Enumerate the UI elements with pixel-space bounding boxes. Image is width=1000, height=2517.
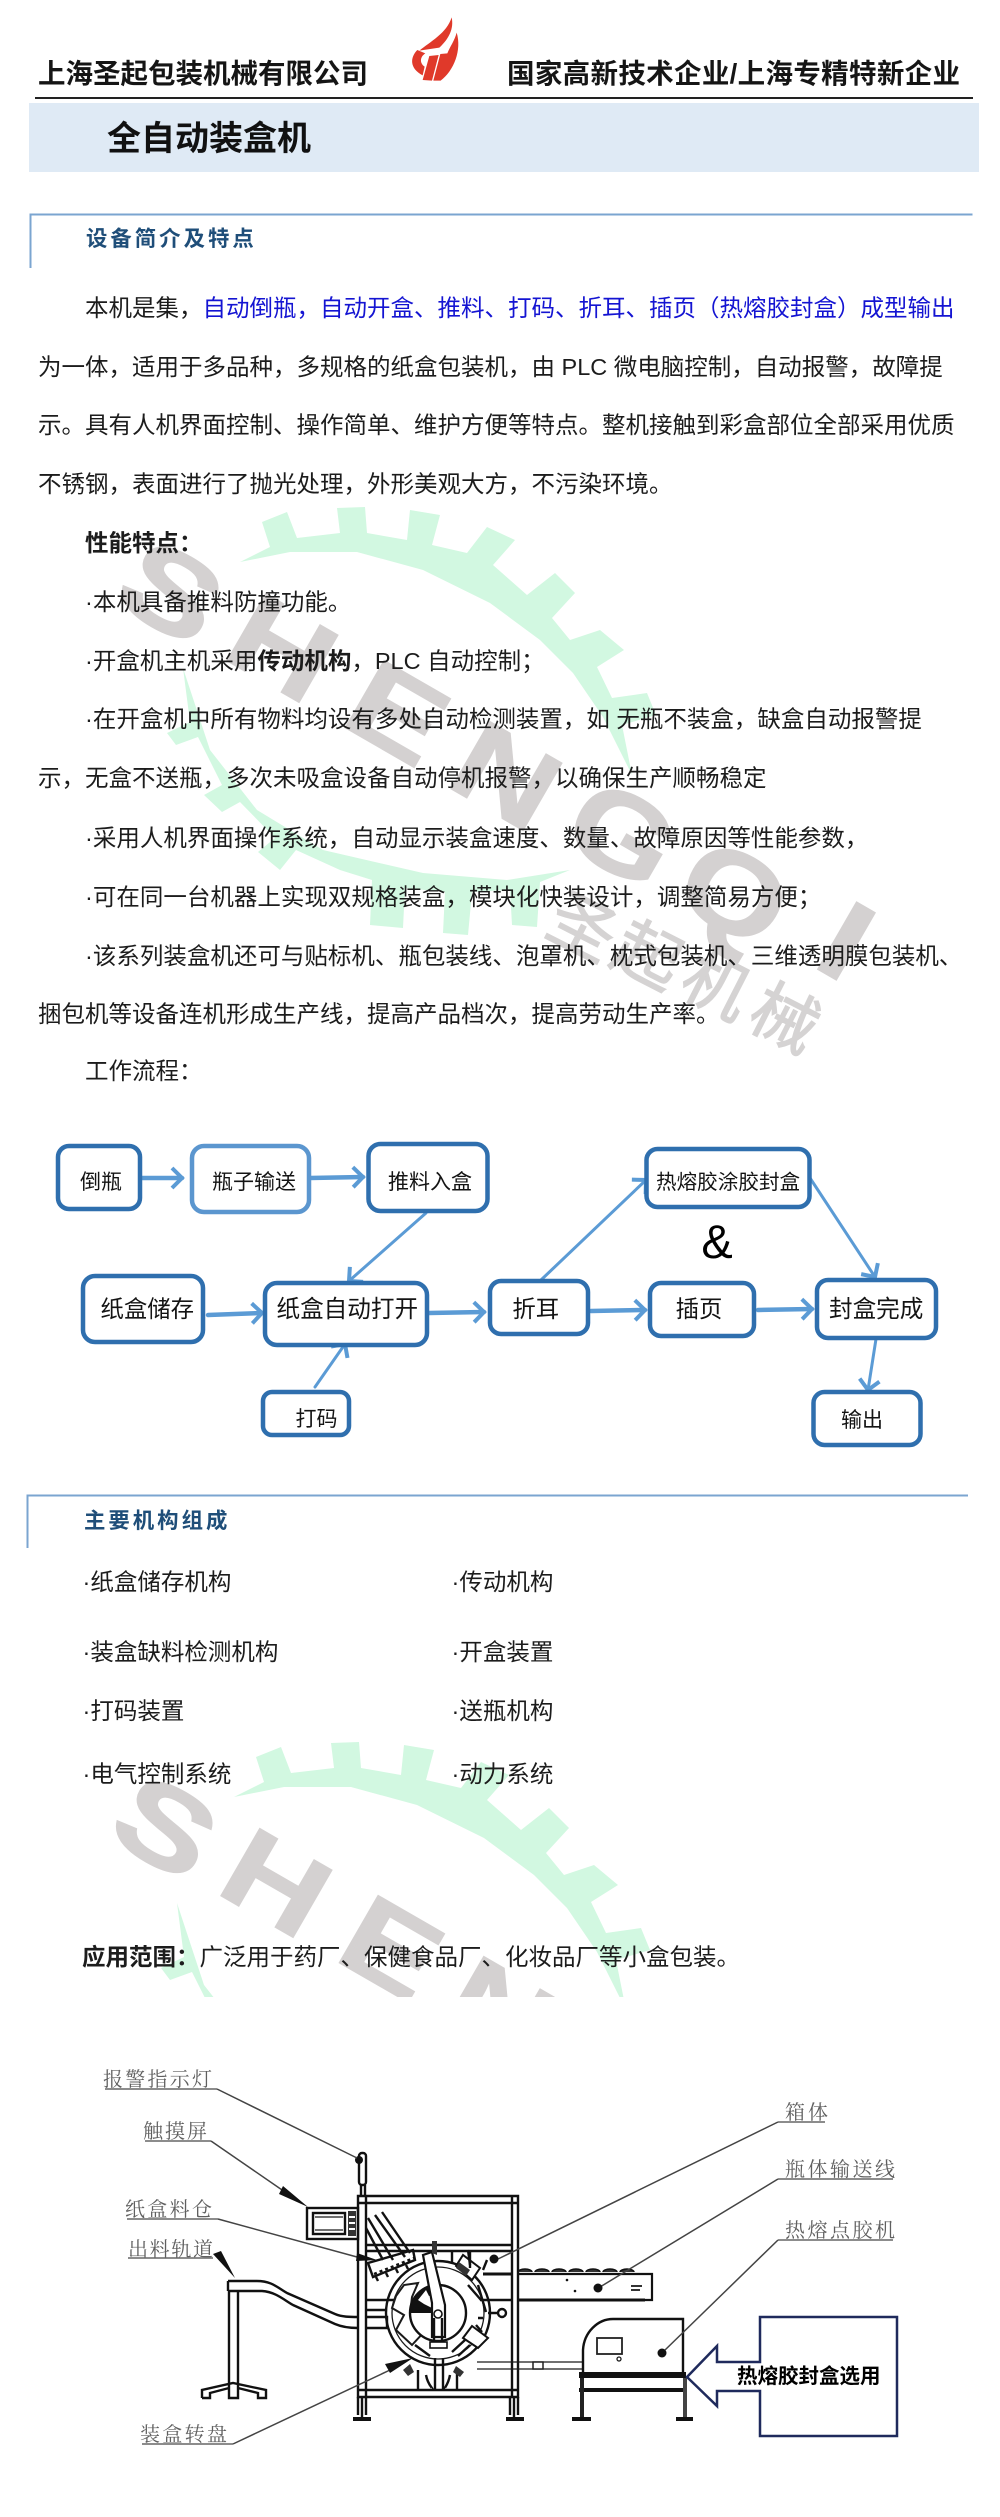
label: 装盒转盘: 装盒转盘 <box>140 2423 227 2446</box>
header rule <box>35 97 973 99</box>
intro paragraph <box>38 295 954 497</box>
label: 瓶体输送线: 瓶体输送线 <box>785 2158 895 2181</box>
label: 箱体: 箱体 <box>785 2101 828 2124</box>
application scope: 应用范围：广泛用于药厂、保健食品厂、化妆品厂等小盒包装。 <box>82 1944 740 1970</box>
node: 纸盒自动打开: 纸盒自动打开 <box>276 1296 418 1323</box>
mechanism list: ·传动机构 <box>452 1569 553 1595</box>
performance features: ·该系列装盒机还可与贴标机、瓶包装线、泡罩机、枕式包装机、三维透明膜包装机、 <box>85 943 962 969</box>
label: 热熔点胶机: 热熔点胶机 <box>785 2219 895 2242</box>
node: 插页 <box>650 1283 754 1336</box>
conveyor <box>477 2269 652 2369</box>
performance features <box>38 530 962 1027</box>
watermark gear lower arc <box>167 668 570 935</box>
arrow: 打码 to 纸盒自动打开 <box>315 1344 345 1387</box>
performance features: ·开盒机主机采用传动机构，PLC 自动控制； <box>85 648 545 674</box>
hot melt glue machine <box>572 2319 693 2421</box>
intro paragraph: 不锈钢，表面进行了抛光处理，外形美观大方，不污染环境。 <box>38 471 672 497</box>
section heading: 设备简介及特点: 设备简介及特点 <box>86 227 257 251</box>
watermark: lower gear and SHENGQI, cropped <box>116 1742 650 1997</box>
lower watermark letters: E <box>319 1870 464 2027</box>
mechanism list: ·送瓶机构 <box>452 1698 553 1724</box>
arrow: 瓶子输送 to 推料入盒 <box>310 1177 363 1178</box>
watermark letters <box>97 512 896 1006</box>
arrow: 热熔胶涂胶封盒 to 封盒完成 <box>810 1178 875 1277</box>
section heading: 主要机构组成 <box>28 1496 968 1548</box>
callout: 热熔胶封盒选用: 热熔胶封盒选用 <box>737 2364 880 2388</box>
label: 触摸屏 <box>143 2120 308 2207</box>
watermark letters: N <box>430 696 582 857</box>
label: 纸盒料仓 <box>125 2198 377 2261</box>
performance features: ·本机具备推料防撞功能。 <box>85 589 351 615</box>
performance features: ·采用人机界面操作系统，自动显示装盒速度、数量、故障原因等性能参数， <box>85 825 868 851</box>
node: 封盒完成: 封盒完成 <box>829 1296 923 1323</box>
title band <box>29 103 979 172</box>
title: 全自动装盒机 <box>107 120 311 158</box>
watermark letters: E <box>325 635 470 792</box>
mechanism list: ·开盒装置 <box>452 1639 553 1665</box>
arrow: 折耳 to 热熔胶涂胶封盒 <box>541 1180 646 1280</box>
label: 瓶体输送线 <box>594 2158 895 2292</box>
lower watermark letters <box>116 1782 555 1997</box>
watermark letters: I <box>797 876 896 1006</box>
watermark letters: S <box>97 512 246 671</box>
node: 瓶子输送 <box>192 1146 309 1212</box>
node: 插页: 插页 <box>676 1296 722 1322</box>
intro paragraph: 示。具有人机界面控制、操作简单、维护方便等特点。整机接触到彩盒部位全部采用优质 <box>38 412 954 438</box>
watermark letters: H <box>206 568 358 729</box>
company name: 上海圣起包装机械有限公司 <box>38 58 368 89</box>
label: 报警指示灯 <box>103 2068 357 2158</box>
label: 出料轨道 <box>128 2238 235 2278</box>
mechanism list: ·装盒缺料检测机构 <box>82 1639 278 1665</box>
arrow: 插页 to 封盒完成 <box>758 1309 812 1310</box>
label: 出料轨道: 出料轨道 <box>128 2238 213 2261</box>
performance features: 性能特点： <box>85 530 202 556</box>
performance features: 捆包机等设备连机形成生产线，提高产品档次，提高劳动生产率。 <box>38 1001 720 1027</box>
node: 输出 <box>814 1392 920 1445</box>
label: 报警指示灯: 报警指示灯 <box>103 2068 212 2091</box>
alarm lamp <box>355 2153 366 2196</box>
intro paragraph: 本机是集，自动倒瓶，自动开盒、推料、打码、折耳、插页（热熔胶封盒）成型输出 <box>85 295 954 321</box>
node: 纸盒储存: 纸盒储存 <box>100 1296 194 1322</box>
lower watermark letters: S <box>91 1747 240 1906</box>
node: 打码: 打码 <box>296 1408 338 1431</box>
watermark chinese name: 机 <box>670 938 763 1034</box>
section heading: 主要机构组成: 主要机构组成 <box>84 1509 230 1533</box>
node: 打码 <box>263 1392 349 1435</box>
mechanism list <box>82 1569 553 1787</box>
arrow: 纸盒自动打开 to 折耳 <box>429 1312 484 1313</box>
label: 触摸屏: 触摸屏 <box>143 2120 207 2143</box>
lower watermark letters: H <box>200 1803 352 1964</box>
label: 箱体 <box>490 2101 828 2264</box>
watermark gear upper arc <box>240 507 656 775</box>
carton magazine <box>366 2212 415 2281</box>
performance features: ·在开盒机中所有物料均设有多处自动检测装置，如 无瓶不装盒，缺盒自动报警提 <box>85 706 922 732</box>
page header <box>35 17 973 99</box>
node: 推料入盒 <box>368 1144 488 1211</box>
ampersand: & <box>701 1215 733 1268</box>
touch screen <box>307 2208 358 2239</box>
node: 热熔胶涂胶封盒 <box>646 1149 810 1207</box>
node: 纸盒自动打开 <box>265 1283 427 1345</box>
arrow: 倒瓶 to 瓶子输送 <box>142 1176 182 1180</box>
lower watermark letters: N <box>424 1931 576 2092</box>
node: 热熔胶涂胶封盒: 热熔胶涂胶封盒 <box>656 1171 801 1194</box>
watermark chinese name: 圣 <box>536 880 629 976</box>
watermark letters: G <box>545 753 699 915</box>
lower watermark gear lower arc <box>161 1904 214 1997</box>
section heading: 设备简介及特点 <box>30 214 972 268</box>
mechanism list: ·纸盒储存机构 <box>82 1569 231 1595</box>
watermark chinese name: 起 <box>601 908 694 1004</box>
watermark chinese name <box>536 880 831 1067</box>
machine diagram <box>103 2068 897 2446</box>
main frame <box>353 2196 524 2421</box>
watermark letters: Q <box>657 812 811 974</box>
mechanism list: ·电气控制系统 <box>82 1761 231 1787</box>
arrow: 折耳 to 插页 <box>591 1310 645 1311</box>
workflow chart <box>58 1144 936 1445</box>
callout: 热熔胶封盒选用 <box>687 2317 897 2436</box>
company credentials: 国家高新技术企业/上海专精特新企业 <box>507 58 960 89</box>
arrow: 纸盒储存 to 纸盒自动打开 <box>208 1313 262 1315</box>
node: 纸盒储存 <box>83 1276 203 1342</box>
node: 折耳 <box>490 1281 588 1334</box>
performance features: 示，无盒不送瓶，多次未吸盒设备自动停机报警，以确保生产顺畅稳定 <box>38 765 766 791</box>
watermark: upper gear and SHENGQI <box>97 507 896 1067</box>
turntable <box>386 2241 506 2389</box>
workflow heading: 工作流程： <box>85 1058 202 1084</box>
performance features: ·可在同一台机器上实现双规格装盒，模块化快装设计，调整简易方便； <box>85 884 821 910</box>
band background <box>29 103 979 172</box>
exit track <box>202 2281 387 2398</box>
arrow: 封盒完成 to 输出 <box>868 1339 876 1390</box>
node: 推料入盒: 推料入盒 <box>388 1171 472 1194</box>
label: 热熔点胶机 <box>658 2219 895 2358</box>
node: 瓶子输送: 瓶子输送 <box>212 1171 296 1194</box>
mechanism list: ·动力系统 <box>452 1761 553 1787</box>
watermark chinese name: 械 <box>738 971 831 1067</box>
node: 倒瓶 <box>58 1146 140 1209</box>
label: 装盒转盘 <box>140 2358 413 2446</box>
intro paragraph: 为一体，适用于多品种，多规格的纸盒包装机，由 PLC 微电脑控制，自动报警，故障提 <box>38 354 943 380</box>
arrow: 推料入盒 to 纸盒自动打开 <box>349 1213 426 1281</box>
icon: red flame logo <box>412 17 458 81</box>
mechanism list: ·打码装置 <box>82 1698 184 1724</box>
label: 纸盒料仓: 纸盒料仓 <box>125 2198 212 2221</box>
node: 折耳: 折耳 <box>512 1296 559 1322</box>
node: 倒瓶: 倒瓶 <box>80 1171 122 1194</box>
lower watermark gear upper arc <box>234 1742 650 2010</box>
node: 输出: 输出 <box>841 1409 883 1432</box>
node: 封盒完成 <box>817 1280 936 1338</box>
